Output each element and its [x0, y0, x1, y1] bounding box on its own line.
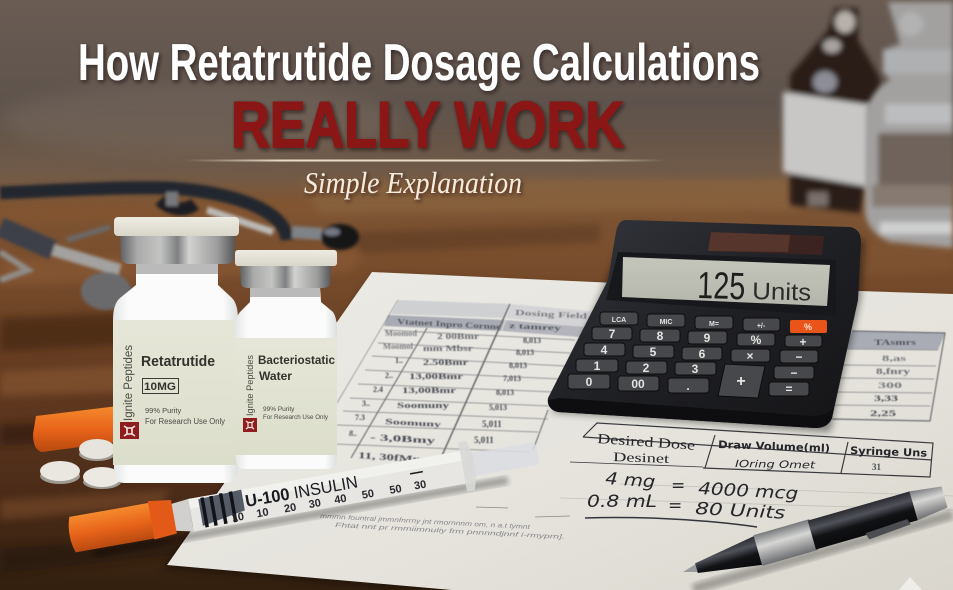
keypad: 0 — [586, 375, 593, 389]
background haze behind title — [0, 85, 400, 155]
table on paper: reconstitution values: 8,013 — [516, 348, 534, 357]
keypad: = — [785, 382, 793, 396]
right side table: 8,fnry — [876, 367, 910, 376]
table: desired dose, draw volume, syringe units: 31 — [872, 462, 882, 472]
table on paper: reconstitution values: z tamrey — [509, 321, 561, 333]
keypad: . — [686, 379, 690, 393]
keypad: LCA — [612, 317, 626, 324]
pills — [40, 439, 121, 489]
table on paper: reconstitution values: 11, 30fMny — [358, 450, 429, 465]
syringe scale: 10 — [256, 506, 270, 520]
orange capped syringe on table — [33, 406, 118, 452]
handwritten calculation: 0.8 mL — [587, 492, 657, 512]
handwritten calculation: = — [668, 496, 682, 516]
keypad: +/- — [757, 323, 766, 330]
right side table: TAsmrs — [874, 338, 916, 347]
product label: 99% Purity — [145, 406, 182, 415]
syringe scale: 40 — [333, 493, 348, 507]
table on paper: reconstitution values: Soomuny — [385, 417, 441, 429]
table: desired dose, draw volume, syringe units: Syringe Uns — [850, 445, 927, 460]
table on paper: reconstitution values: Moomol — [383, 342, 414, 351]
syringe scale: 50 — [389, 483, 403, 497]
vial: Bacteriostatic Water — [235, 250, 337, 469]
brand name: Ignite Peptides — [245, 355, 256, 416]
right side table: 8,as — [882, 354, 906, 363]
table on paper: reconstitution values: Moomod — [385, 329, 418, 338]
table: desired dose, draw volume, syringe units — [570, 423, 933, 477]
background: wooden table — [0, 152, 953, 590]
product name: Retatrutide — [141, 353, 215, 370]
table on paper: reconstitution values: 8.. — [349, 429, 357, 438]
keypad: % — [751, 333, 762, 347]
table on paper: reconstitution values: 2.50Bmr — [423, 358, 469, 367]
fine print on paper: mmmn fountral jmmnfnrrny jnt rmornnnm om, n a.t tymnt — [320, 513, 532, 531]
keypad: 6 — [699, 347, 706, 361]
fine print on paper — [320, 507, 570, 541]
clear glass bottle — [865, 2, 953, 248]
syringe label: U-100 INSULIN — [244, 472, 359, 511]
stethoscope — [0, 188, 359, 310]
product label: 99% Purity — [263, 406, 295, 413]
syringe scale: 20 — [283, 501, 297, 515]
strength box: 10MG — [144, 381, 176, 393]
table on paper: reconstitution values: 2 00Bmr — [437, 332, 480, 341]
display screen: Units — [752, 278, 812, 307]
table on paper: reconstitution values: 7,013 — [503, 374, 521, 383]
table on paper: reconstitution values: 5,011 — [474, 435, 494, 445]
strength box — [142, 378, 178, 394]
vial: Retatrutide — [113, 217, 239, 483]
table on paper: reconstitution values: 13,00Bmr — [402, 386, 457, 395]
table on paper: reconstitution values — [335, 300, 600, 465]
keypad: 2 — [643, 361, 650, 375]
logo — [243, 418, 257, 432]
table on paper: reconstitution values: 2.. — [385, 371, 393, 380]
dark stopper — [198, 490, 246, 526]
keypad: 5 — [650, 345, 657, 359]
syringe scale: 30 — [308, 497, 322, 511]
table on paper: reconstitution values: 8,013 — [523, 336, 541, 345]
table on paper: reconstitution values: - 3,0Bmy — [370, 432, 436, 445]
table on paper: reconstitution values: 3.. — [362, 399, 370, 408]
flip cap — [114, 217, 239, 236]
product label: For Research Use Only — [263, 414, 329, 421]
syringe scale — [231, 479, 427, 525]
handwritten calculation: 4000 mcg — [698, 479, 799, 504]
title line 2: REALLY WORK — [231, 88, 624, 161]
table: desired dose, draw volume, syringe units: Draw Volume(ml) — [718, 439, 830, 455]
table on paper: reconstitution values: Dosing Field — [515, 308, 588, 321]
pen — [679, 481, 953, 590]
table on paper: reconstitution values: 7.3 — [355, 413, 365, 422]
table on paper: reconstitution values: 8,013 — [496, 388, 514, 397]
barrel — [188, 450, 471, 532]
right side table — [830, 331, 945, 421]
product name: Bacteriostatic — [258, 353, 335, 367]
table on paper: reconstitution values: 8,013 — [509, 361, 527, 370]
table on paper: reconstitution values: 2.4 — [373, 385, 383, 394]
table: desired dose, draw volume, syringe units: IOring Omet — [735, 459, 817, 471]
keypad: + — [736, 373, 746, 390]
handwritten calculation: = — [671, 476, 685, 496]
keypad: 00 — [631, 377, 645, 391]
fine print on paper: Fhtat nnt pr rmmiimnuliy frm pnnnndjnnf i-rmyprn]. — [335, 522, 565, 541]
handwritten calculation — [560, 469, 953, 527]
table on paper: reconstitution values: Vtatnet Inpro Cornne — [397, 317, 502, 331]
product label: Water — [259, 369, 292, 383]
keypad — [568, 312, 827, 398]
syringe: U-100 insulin — [65, 429, 542, 561]
table on paper: reconstitution values: 13,00Bmr — [409, 372, 464, 381]
keypad: 7 — [609, 327, 616, 341]
product label — [235, 338, 337, 455]
keypad: 3 — [692, 362, 699, 376]
keypad: × — [746, 349, 754, 363]
display screen: 125 — [697, 265, 746, 308]
keypad: % — [804, 322, 812, 332]
paper with dosage sheet — [163, 272, 953, 590]
subtitle: Simple Explanation — [304, 165, 522, 200]
glass body — [113, 262, 238, 483]
divider rule — [185, 160, 665, 162]
table on paper: reconstitution values: 1.. — [395, 356, 403, 365]
calculator — [548, 220, 865, 432]
right side table: 300 — [878, 381, 902, 390]
right side table: 3,33 — [874, 394, 898, 403]
table on paper: reconstitution values: Soomuny — [397, 401, 449, 410]
keypad: + — [799, 335, 807, 349]
keypad: MIC — [660, 319, 672, 326]
solar panel — [708, 232, 824, 255]
calculator body — [548, 220, 861, 428]
watermark triangle — [899, 577, 922, 590]
table: desired dose, draw volume, syringe units: Desired Dose — [597, 432, 696, 454]
brand name: Ignite Peptides — [123, 345, 135, 421]
handwritten calculation: 4 mg — [605, 469, 656, 492]
metal collar — [120, 235, 235, 264]
logo — [120, 422, 139, 439]
keypad: − — [795, 350, 803, 364]
handwritten calculation: 80 Units — [695, 499, 786, 524]
product label — [113, 320, 238, 465]
keypad: 1 — [594, 359, 601, 373]
needle hub — [170, 499, 194, 535]
table on paper: reconstitution values: 5,013 — [489, 403, 507, 412]
syringe scale: 10 — [231, 511, 245, 525]
plunger — [465, 442, 539, 477]
dark glass bottle — [783, 8, 880, 213]
background: wall — [0, 0, 953, 190]
right side table: 2,25 — [870, 409, 896, 418]
syringe scale: 30 — [413, 479, 427, 492]
syringe scale: 50 — [361, 488, 375, 502]
table: desired dose, draw volume, syringe units: Desinet — [613, 449, 670, 466]
keypad: 9 — [704, 331, 711, 345]
flange — [458, 440, 479, 491]
orange needle cap — [66, 503, 156, 553]
keypad: M= — [709, 321, 719, 328]
table on paper: reconstitution values: mm Mbsr — [423, 344, 474, 353]
keypad: 8 — [657, 329, 664, 343]
display screen — [606, 252, 836, 316]
product label: For Research Use Only — [145, 417, 225, 426]
keypad: 4 — [601, 343, 608, 357]
keypad: − — [790, 366, 798, 380]
table on paper: reconstitution values: 5,011 — [482, 419, 502, 429]
